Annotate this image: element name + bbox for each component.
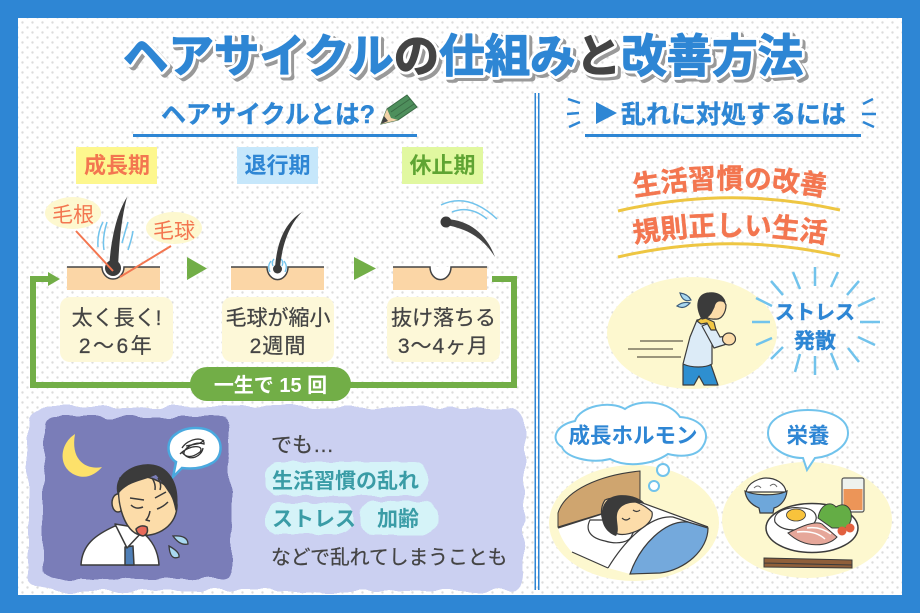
panel: lifestyle disruption [29, 407, 524, 591]
callout: stress relief: 発散 [794, 330, 836, 353]
stage label: regression [237, 147, 318, 184]
heading: how to cope: 乱れに対処するには [621, 101, 846, 129]
thought cloud: growth hormone: 成長ホルモン [568, 424, 698, 448]
emphasis rays left [567, 99, 580, 127]
arched text: lifestyle improvement: 生活習慣の改善 [632, 164, 826, 198]
icon: sweat drops [169, 536, 188, 558]
stage label: regression: 退行期 [244, 153, 311, 178]
icon: moon [63, 434, 102, 477]
emphasis rays right [862, 99, 876, 127]
highlight: stress: ストレス [272, 508, 356, 531]
illustration: tired man [81, 465, 177, 565]
text box: regression: 毛球が縮小 [226, 307, 330, 330]
highlight: stress [266, 503, 356, 534]
stage label: growth: 成長期 [84, 153, 150, 178]
burst lines [752, 267, 880, 375]
badge: 15 times in a lifetime [190, 367, 351, 401]
panel: how to cope [549, 98, 892, 581]
title: ヘアサイクルの仕組みと改善方法 [123, 31, 803, 82]
illustration: running man [607, 277, 777, 389]
illustration: meal [722, 462, 892, 578]
highlight: aging [360, 501, 438, 535]
diagram: regression follicle [231, 212, 324, 290]
curved line [618, 244, 840, 257]
curved line [618, 198, 840, 211]
panel: hair cycle [33, 95, 514, 401]
icon: worry speech bubble [168, 428, 221, 477]
text box: rest: 3〜4ヶ月 [398, 335, 489, 358]
callout: stress relief: ストレス [775, 302, 855, 324]
icon: pencil [381, 95, 417, 124]
title: ヘアサイクルの仕組みと改善方法 [123, 31, 803, 82]
stage label: growth [76, 147, 157, 184]
text box: regression [222, 297, 334, 362]
badge: 15 times in a lifetime: 一生で 15 回 [214, 374, 327, 397]
text box: growth: 2〜6年 [79, 335, 154, 358]
text box: growth [60, 297, 173, 362]
highlight: aging: 加齢 [377, 508, 419, 531]
highlight: lifestyle disruption: 生活習慣の乱れ [272, 470, 419, 493]
text box: growth: 太く長く! [72, 307, 161, 330]
text box: regression: 2週間 [250, 335, 306, 358]
speech bubble: nutrition [768, 410, 848, 470]
diagram: growth follicle: 毛根 [52, 204, 94, 227]
arched text: regular life: 規則正しい生活 [632, 212, 828, 246]
arrow: cycle loop [33, 272, 514, 385]
highlight: lifestyle disruption [266, 462, 427, 496]
arrow: growth to regression [187, 257, 207, 280]
text box: rest: 抜け落ちる [391, 307, 496, 330]
stage label: rest: 休止期 [409, 153, 476, 178]
heading underline [585, 134, 861, 137]
illustration: sleeping person [549, 465, 719, 581]
night scene [43, 417, 231, 579]
arrow: regression to rest [354, 257, 376, 280]
text: can be disrupted: などで乱れてしまうことも [271, 547, 507, 569]
diagram: rest follicle [393, 201, 497, 290]
speech bubble: nutrition: 栄養 [786, 424, 830, 448]
text box: rest [387, 297, 500, 362]
heading underline [133, 134, 417, 137]
title: ヘアサイクルの仕組みと改善方法 [126, 34, 806, 85]
heading: what is the hair cycle: ヘアサイクルとは? [161, 101, 375, 129]
diagram: growth follicle [45, 197, 202, 290]
stage label: rest [402, 147, 483, 184]
text: but: でも… [271, 434, 334, 457]
thought cloud: growth hormone [556, 402, 706, 464]
diagram: growth follicle: 毛球 [153, 220, 195, 243]
thought bubbles [649, 464, 669, 491]
